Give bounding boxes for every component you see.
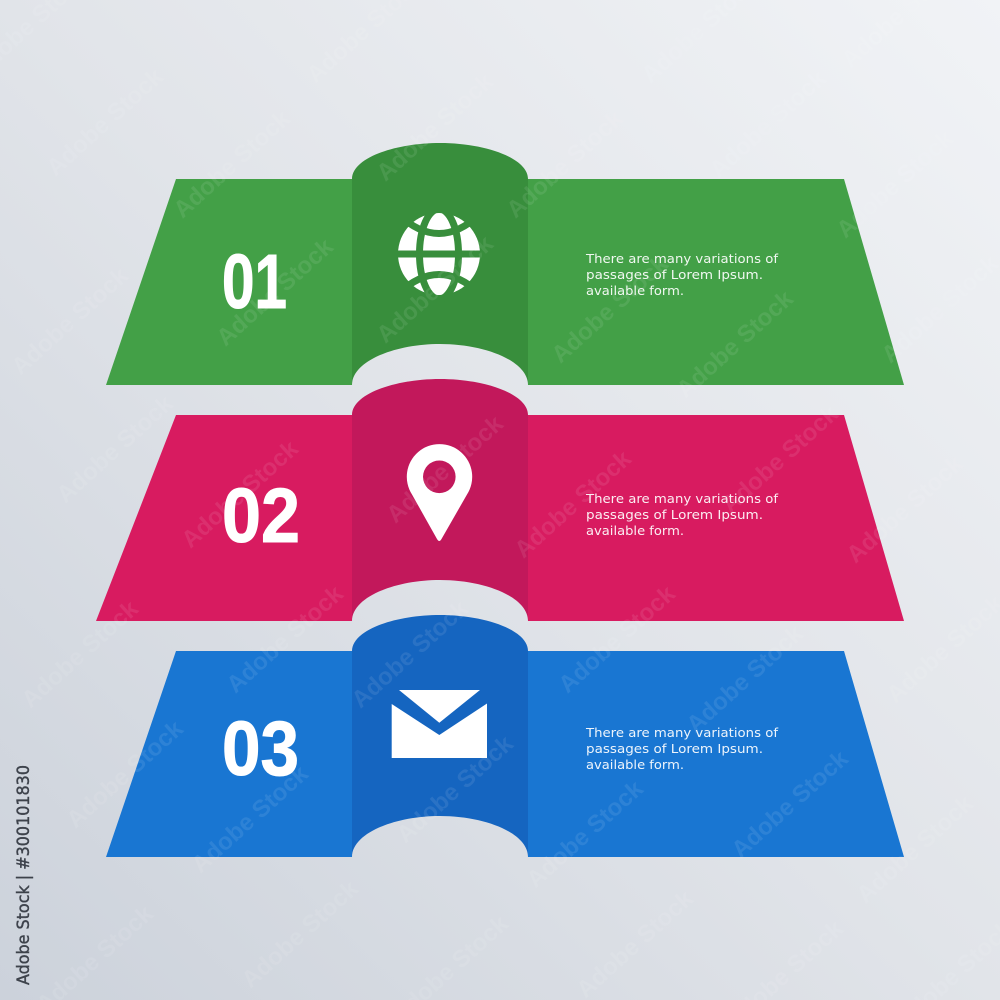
watermark: Adobe Stock: [546, 250, 674, 369]
watermark: Adobe Stock: [371, 68, 499, 187]
watermark: Adobe Stock: [221, 580, 349, 699]
watermark: Adobe Stock: [371, 230, 499, 349]
text block 3: available form.: [586, 757, 684, 772]
watermark: Adobe Stock: [346, 595, 474, 714]
watermark: Adobe Stock: [831, 125, 959, 244]
watermark: Adobe Stock: [41, 63, 169, 182]
text block 2: passages of Lorem Ipsum.: [586, 507, 763, 522]
watermark: Adobe Stock: [876, 250, 1000, 369]
watermark: Adobe Stock: [211, 233, 339, 352]
watermark: Adobe Stock: [704, 65, 832, 184]
watermark: Adobe Stock: [571, 885, 699, 1000]
text block 3: There are many variations of: [585, 725, 779, 740]
text block 3: [585, 725, 779, 772]
watermark: Adobe Stock: [61, 715, 189, 834]
text block 2: available form.: [586, 523, 684, 538]
watermark: Adobe Stock: [681, 620, 809, 739]
number 01: 01: [222, 239, 287, 325]
panel 1: green: [106, 143, 904, 385]
text block 1: passages of Lorem Ipsum.: [586, 267, 763, 282]
icon: globe: [394, 209, 484, 299]
number 02: 02: [222, 473, 300, 559]
text block 1: available form.: [586, 283, 684, 298]
pink centre fold: [352, 379, 528, 621]
watermark: Adobe Stock: [716, 400, 844, 519]
icon: envelope: [392, 690, 487, 758]
text block 1: There are many variations of: [585, 251, 779, 266]
text block 3: passages of Lorem Ipsum.: [586, 741, 763, 756]
watermark: Adobe Stock: [509, 445, 637, 564]
number 03: 03: [222, 706, 299, 792]
text block 2: [585, 491, 779, 538]
watermark: Adobe Stock: [51, 390, 179, 509]
green centre fold: [352, 143, 528, 385]
watermark: Adobe Stock: [726, 745, 854, 864]
watermark: Adobe Stock: [841, 450, 969, 569]
pink band: [96, 415, 904, 621]
watermark: Adobe Stock: [236, 875, 364, 994]
blue centre fold: [352, 615, 528, 857]
green band: [106, 179, 904, 385]
watermark: Adobe Stock: [671, 285, 799, 404]
text block 2: There are many variations of: [585, 491, 779, 506]
watermark: Adobe Stock: [6, 262, 134, 381]
text block 1: [585, 251, 779, 298]
panel 3: blue: [106, 615, 904, 857]
panel 2: pink: [96, 379, 904, 621]
watermark: Adobe Stock: [16, 595, 144, 714]
watermark: Adobe Stock: [168, 105, 296, 224]
stock id side label: Adobe Stock | #300101830: [14, 765, 34, 985]
watermark: Adobe Stock: [186, 760, 314, 879]
icon: location pin: [407, 444, 472, 541]
watermark: Adobe Stock: [501, 105, 629, 224]
watermark: Adobe Stock: [176, 435, 304, 554]
watermark: Adobe Stock: [851, 790, 979, 909]
watermark: Adobe Stock: [553, 580, 681, 699]
watermark: Adobe Stock: [521, 775, 649, 894]
blue band: [106, 651, 904, 857]
watermark: Adobe Stock: [391, 730, 519, 849]
watermark: Adobe Stock: [381, 410, 509, 529]
